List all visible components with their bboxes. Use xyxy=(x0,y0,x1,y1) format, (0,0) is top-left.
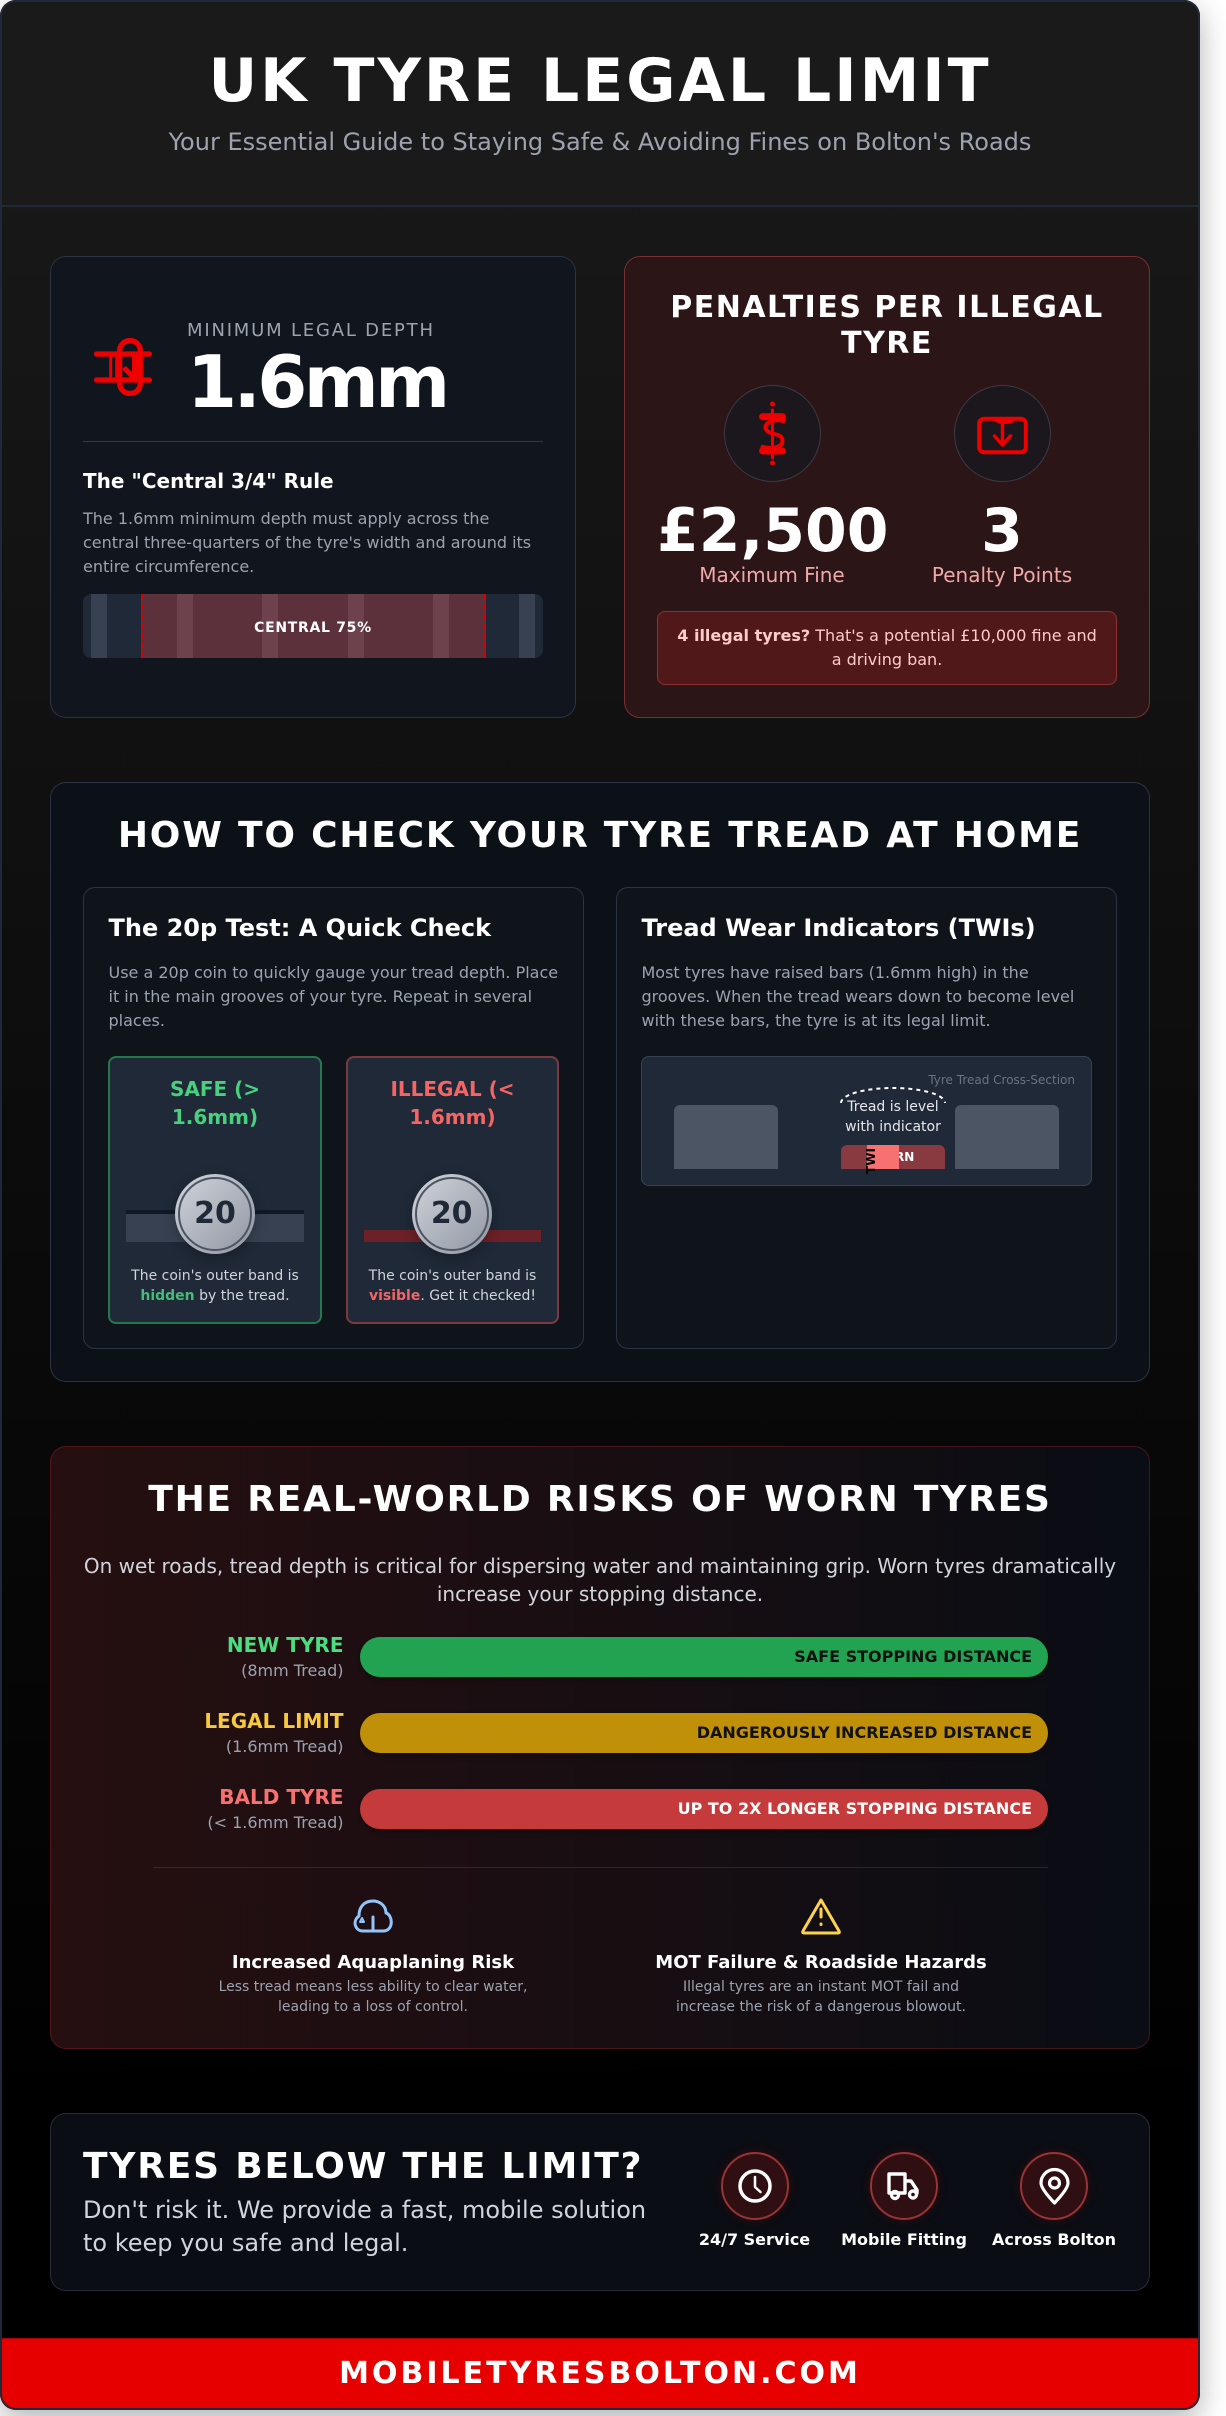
label: 24/7 service: 24/7 Service xyxy=(699,2230,810,2249)
panel: 20p test xyxy=(83,887,584,1349)
heading: tyres below the limit: TYRES BELOW THE LIMIT? xyxy=(83,2146,643,2186)
text: illegal note: visible. Get it checked! xyxy=(369,1288,536,1304)
card: safe xyxy=(108,1056,322,1324)
stat: maximum fine xyxy=(657,385,889,587)
icon: 20p coin xyxy=(175,1174,255,1254)
panel: how to check tyre tread xyxy=(50,782,1150,1382)
row: legal limit xyxy=(204,1709,1048,1756)
label: minimum legal depth: MINIMUM LEGAL DEPTH xyxy=(187,320,435,341)
label: maximum fine: Maximum Fine xyxy=(699,563,845,587)
icon: 20p coin xyxy=(412,1174,492,1254)
annotation: tread is level: Tread is level xyxy=(847,1099,939,1115)
worn groove with indicator xyxy=(841,1145,945,1169)
diagram: central 75% tread bar: CENTRAL 75% xyxy=(254,620,372,636)
footer xyxy=(0,2338,1200,2410)
text: central rule description xyxy=(82,508,531,576)
text: 20p description: Use a 20p coin to quickly gauge your tread depth. Place xyxy=(108,962,558,982)
icon: penalty points xyxy=(954,385,1050,482)
panel: minimum legal depth xyxy=(50,256,576,718)
label: illegal: 1.6mm) xyxy=(409,1105,496,1129)
panel: real-world risks xyxy=(50,1446,1150,2049)
worn groove with indicator: WORN xyxy=(872,1150,914,1164)
icon: warning triangle xyxy=(801,1898,841,1934)
footer url: MOBILETYRESBOLTON.COM xyxy=(339,2356,861,2390)
label: mobile fitting: Mobile Fitting xyxy=(841,2230,967,2249)
row: new tyre xyxy=(227,1633,1048,1680)
heading: aquaplaning: Increased Aquaplaning Risk xyxy=(232,1952,514,1973)
text: TWI description: grooves. When the tread wears down to become level xyxy=(642,986,1074,1006)
label: penalty points: Penalty Points xyxy=(932,563,1072,587)
row: bald tyre: UP TO 2X LONGER STOPPING DISTANCE xyxy=(678,1799,1032,1818)
text: risks intro: increase your stopping distance. xyxy=(437,1582,763,1606)
text: 20p description xyxy=(108,962,558,1030)
text: illegal note: The coin's outer band is xyxy=(369,1268,536,1284)
text: call to action: Don't risk it. We provide a fast, mobile solution xyxy=(83,2196,646,2224)
icon: pound fine xyxy=(724,385,820,482)
subtitle: Your Essential Guide to Staying Safe & Avoiding Fines on Bolton's Roads xyxy=(169,128,1031,156)
row: bald tyre xyxy=(207,1785,1048,1832)
text: MOT failure: increase the risk of a dangerous blowout. xyxy=(676,1999,966,2015)
heading: 20p test: The 20p Test: A Quick Check xyxy=(108,914,491,942)
tread block right xyxy=(955,1105,1059,1169)
text: safe note xyxy=(131,1268,299,1304)
text: safe note: hidden by the tread. xyxy=(140,1288,290,1304)
label: across Bolton: Across Bolton xyxy=(992,2230,1116,2249)
row: legal limit: LEGAL LIMIT xyxy=(204,1709,344,1733)
icon: location pin xyxy=(1020,2152,1088,2220)
icon: 20p coin: 20 xyxy=(431,1196,473,1231)
icon: clock xyxy=(720,2152,788,2220)
heading: MOT failure: MOT Failure & Roadside Hazards xyxy=(655,1952,987,1973)
text: aquaplaning xyxy=(219,1979,527,2015)
icon: 20p coin: 20 xyxy=(194,1196,236,1231)
title: UK TYRE LEGAL LIMIT xyxy=(208,46,992,116)
label: illegal: ILLEGAL (< xyxy=(390,1077,515,1101)
text: call to action xyxy=(83,2196,646,2256)
text: TWI description: with these bars, the tyre is at its legal limit. xyxy=(642,1010,991,1030)
label: safe: 1.6mm) xyxy=(172,1105,258,1129)
icon: van xyxy=(870,2152,938,2220)
header xyxy=(0,0,1200,207)
panel: call to action xyxy=(50,2113,1150,2291)
heading: central rule: The "Central 3/4" Rule xyxy=(83,468,334,492)
text: risks intro: On wet roads, tread depth is critical for dispersing water and maintaining grip. Worn tyres dramatically xyxy=(84,1554,1116,1578)
row: new tyre: (8mm Tread) xyxy=(241,1661,344,1680)
divider xyxy=(153,1867,1048,1868)
text: central rule description: The 1.6mm minimum depth must apply across the xyxy=(83,508,489,528)
text: 20p description: it in the main grooves of your tyre. Repeat in several xyxy=(108,986,532,1006)
text: illegal note xyxy=(368,1268,536,1304)
feature: 24/7 service xyxy=(699,2149,810,2249)
text: 20p description: places. xyxy=(108,1010,165,1030)
text: TWI description: Most tyres have raised bars (1.6mm high) in the xyxy=(642,962,1029,982)
value: £2,500: £2,500 xyxy=(657,496,889,566)
text: MOT failure: Illegal tyres are an instant MOT fail and xyxy=(683,1979,959,1995)
panel: penalties xyxy=(624,256,1150,718)
caption: cross-section: Tyre Tread Cross-Section xyxy=(928,1073,1075,1087)
label: safe xyxy=(170,1077,260,1129)
heading: risks: THE REAL-WORLD RISKS OF WORN TYRES xyxy=(148,1478,1052,1520)
chart: stopping distance xyxy=(204,1633,1048,1832)
feature: across Bolton xyxy=(992,2149,1116,2249)
callout: 4 illegal tyres xyxy=(657,611,1117,685)
feature: mobile fitting xyxy=(841,2149,967,2249)
icon: tyre tread depth xyxy=(94,338,152,396)
heading: penalties xyxy=(670,290,1104,360)
heading: penalties: TYRE xyxy=(841,326,933,360)
stat: penalty points xyxy=(932,385,1072,587)
label: safe: SAFE (> xyxy=(170,1077,260,1101)
row: new tyre: SAFE STOPPING DISTANCE xyxy=(794,1647,1032,1666)
icon: cloud rain xyxy=(354,1900,393,1932)
row: legal limit: DANGEROUSLY INCREASED DISTANCE xyxy=(697,1723,1032,1742)
callout: 4 illegal tyres: a driving ban. xyxy=(832,650,942,669)
label: illegal xyxy=(390,1077,515,1129)
row: new tyre: NEW TYRE xyxy=(227,1633,344,1657)
divider xyxy=(83,441,543,442)
risk: aquaplaning xyxy=(219,1900,527,2015)
panel: tread wear indicators xyxy=(616,887,1117,1349)
text: call to action: to keep you safe and legal. xyxy=(83,2228,408,2256)
value: 1.6mm: 1.6mm xyxy=(187,340,447,424)
risk: MOT failure xyxy=(655,1898,987,2015)
text: TWI description xyxy=(642,962,1074,1030)
row: bald tyre: BALD TYRE xyxy=(219,1785,344,1809)
text: risks intro xyxy=(84,1554,1116,1606)
dashed arc xyxy=(840,1087,946,1103)
text: safe note: The coin's outer band is xyxy=(131,1268,299,1284)
callout: 4 illegal tyres: 4 illegal tyres? That's a potential £10,000 fine and xyxy=(677,626,1097,645)
text: MOT failure xyxy=(676,1979,966,2015)
text: aquaplaning: leading to a loss of control. xyxy=(278,1999,468,2015)
text: central rule description: central three-quarters of the tyre's width and around its xyxy=(83,532,531,552)
diagram: central 75% tread bar xyxy=(83,594,543,658)
heading: how to check: HOW TO CHECK YOUR TYRE TREAD AT HOME xyxy=(118,814,1082,856)
value: 3: 3 xyxy=(981,496,1023,566)
annotation: tread is level: with indicator xyxy=(845,1119,941,1135)
diagram: tyre tread cross-section xyxy=(641,1056,1092,1186)
diagram: worn tread xyxy=(364,1230,541,1242)
text: central rule description: entire circumference. xyxy=(83,556,254,576)
worn groove with indicator: TWI xyxy=(864,1148,878,1174)
diagram: tread covering coin xyxy=(126,1210,304,1242)
row: legal limit: (1.6mm Tread) xyxy=(226,1737,344,1756)
annotation: tread is level xyxy=(845,1099,941,1135)
tread block left xyxy=(674,1105,778,1169)
row: bald tyre: (< 1.6mm Tread) xyxy=(207,1813,344,1832)
text: aquaplaning: Less tread means less ability to clear water, xyxy=(219,1979,527,1995)
heading: TWIs: Tread Wear Indicators (TWIs) xyxy=(642,914,1036,942)
heading: penalties: PENALTIES PER ILLEGAL xyxy=(670,290,1104,324)
card: illegal xyxy=(346,1056,559,1324)
